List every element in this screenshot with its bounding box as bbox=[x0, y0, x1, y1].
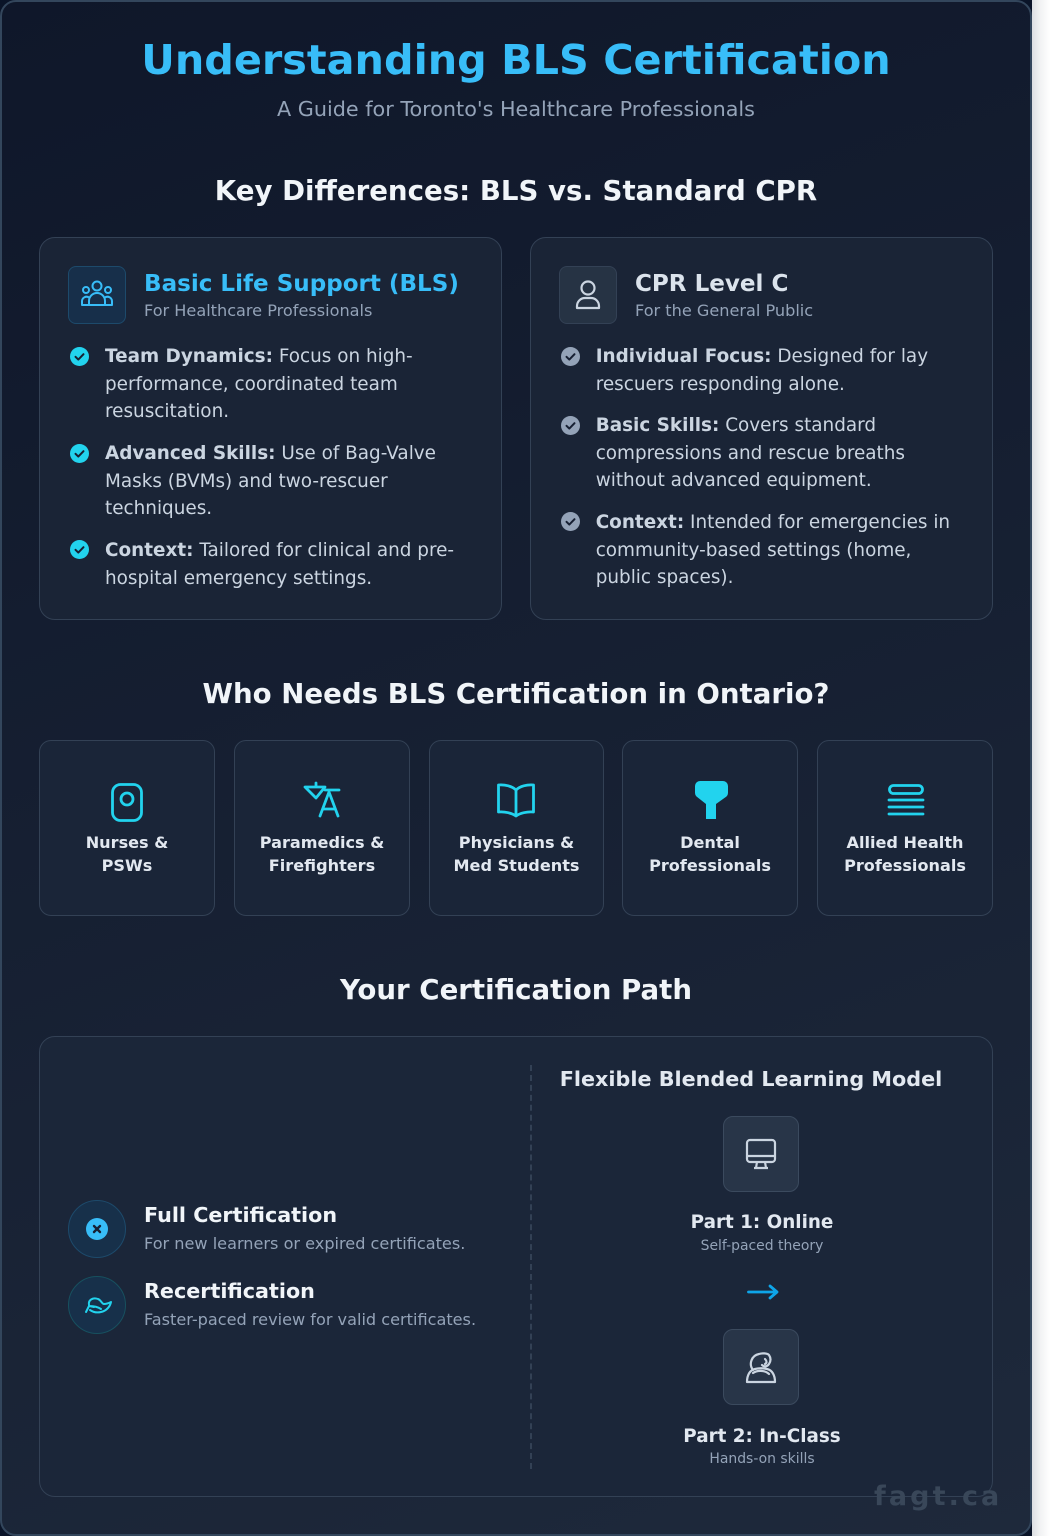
point: advanced skills: Advanced Skills: Use of Bag-Valve bbox=[105, 442, 436, 464]
point: context: Context: Intended for emergencies in bbox=[596, 512, 950, 532]
list: CPR points bbox=[561, 346, 950, 588]
panel: certification path bbox=[39, 1036, 993, 1497]
point: team dynamics: Team Dynamics: Focus on high- bbox=[105, 346, 413, 366]
label: Allied Health bbox=[847, 833, 963, 852]
card: paramedics bbox=[234, 740, 410, 916]
panel: CPR bbox=[530, 237, 993, 620]
icon: hand badge bbox=[68, 1276, 126, 1334]
point: basic skills: compressions and rescue breaths bbox=[596, 442, 905, 464]
point: context: public spaces). bbox=[596, 566, 733, 588]
arrow bbox=[747, 1284, 778, 1300]
label: Physicians & bbox=[459, 833, 574, 852]
point: context bbox=[561, 512, 950, 588]
card: physicians bbox=[429, 740, 604, 916]
label: Nurses & bbox=[86, 833, 168, 852]
subtitle: A Guide for Toronto's Healthcare Professionals bbox=[277, 97, 755, 121]
point: basic skills bbox=[561, 414, 905, 490]
icon: instructor bbox=[723, 1329, 799, 1405]
heading: certification path: Your Certification Path bbox=[340, 973, 692, 1006]
step: in-class bbox=[683, 1329, 841, 1467]
option text: Faster-paced review for valid certificates. bbox=[144, 1310, 476, 1329]
label: Med Students bbox=[454, 856, 579, 875]
card: allied bbox=[817, 740, 993, 916]
point: team dynamics: resuscitation. bbox=[105, 400, 229, 422]
icon: open book bbox=[497, 784, 535, 818]
point: context: Context: Tailored for clinical and pre- bbox=[105, 540, 454, 560]
icon: monitor bbox=[723, 1116, 799, 1192]
panel title: Basic Life Support (BLS) bbox=[144, 271, 459, 297]
icon: paramedics bbox=[304, 782, 340, 818]
label: Paramedics & bbox=[260, 833, 384, 852]
divider bbox=[530, 1065, 532, 1469]
option: recertification bbox=[68, 1276, 476, 1334]
label: Professionals bbox=[649, 856, 771, 875]
label: Firefighters bbox=[269, 856, 375, 875]
point: context bbox=[70, 540, 454, 588]
point: advanced skills: Masks (BVMs) and two-rescuer bbox=[105, 470, 388, 492]
heading: who needs: Who Needs BLS Certification in Ontario? bbox=[203, 677, 829, 710]
icon: x badge bbox=[68, 1200, 126, 1258]
point: basic skills: Basic Skills: Covers standard bbox=[596, 414, 876, 436]
label: Dental bbox=[680, 833, 740, 852]
card: nurses bbox=[39, 740, 215, 916]
icon: person bbox=[559, 266, 617, 324]
point: individual focus: rescuers responding alone. bbox=[596, 374, 845, 394]
icon: nurses bbox=[111, 783, 143, 822]
point: individual focus bbox=[561, 346, 928, 394]
label bbox=[649, 833, 771, 875]
title: Understanding BLS Certification bbox=[141, 36, 891, 84]
icon: funnel bbox=[695, 781, 728, 819]
label bbox=[86, 833, 168, 875]
point: context: community-based settings (home, bbox=[596, 540, 911, 560]
step text: Self-paced theory bbox=[701, 1238, 823, 1254]
panel title: CPR Level C bbox=[635, 271, 788, 297]
panel subtitle: For Healthcare Professionals bbox=[144, 301, 372, 320]
step: online bbox=[691, 1116, 833, 1254]
point: basic skills: without advanced equipment. bbox=[596, 470, 872, 490]
list: BLS points bbox=[70, 346, 454, 588]
label: Professionals bbox=[844, 856, 966, 875]
label: PSWs bbox=[102, 856, 152, 875]
option title: Recertification bbox=[144, 1279, 315, 1303]
option: full certification bbox=[68, 1200, 465, 1258]
label bbox=[260, 833, 384, 875]
label bbox=[844, 833, 966, 875]
panel: BLS bbox=[39, 237, 502, 620]
point: team dynamics: performance, coordinated team bbox=[105, 374, 398, 394]
icon: stacked lines bbox=[888, 784, 924, 816]
label bbox=[454, 833, 579, 875]
point: individual focus: Individual Focus: Designed for lay bbox=[596, 346, 928, 366]
point: team dynamics bbox=[70, 346, 413, 422]
point: advanced skills: techniques. bbox=[105, 498, 212, 518]
panel subtitle: For the General Public bbox=[635, 301, 813, 320]
card: dental bbox=[622, 740, 798, 916]
watermark: fagt.ca bbox=[874, 1481, 1002, 1512]
option text: For new learners or expired certificates. bbox=[144, 1234, 465, 1253]
heading: key differences: Key Differences: BLS vs. Standard CPR bbox=[215, 174, 817, 207]
heading: blended model: Flexible Blended Learning Model bbox=[560, 1067, 942, 1091]
point: context: hospital emergency settings. bbox=[105, 568, 372, 588]
point: advanced skills bbox=[70, 442, 436, 518]
option title: Full Certification bbox=[144, 1203, 337, 1227]
icon: people bbox=[68, 266, 126, 324]
step text: Hands-on skills bbox=[709, 1451, 815, 1467]
step title: Part 2: In-Class bbox=[683, 1426, 841, 1447]
step title: Part 1: Online bbox=[691, 1212, 833, 1233]
